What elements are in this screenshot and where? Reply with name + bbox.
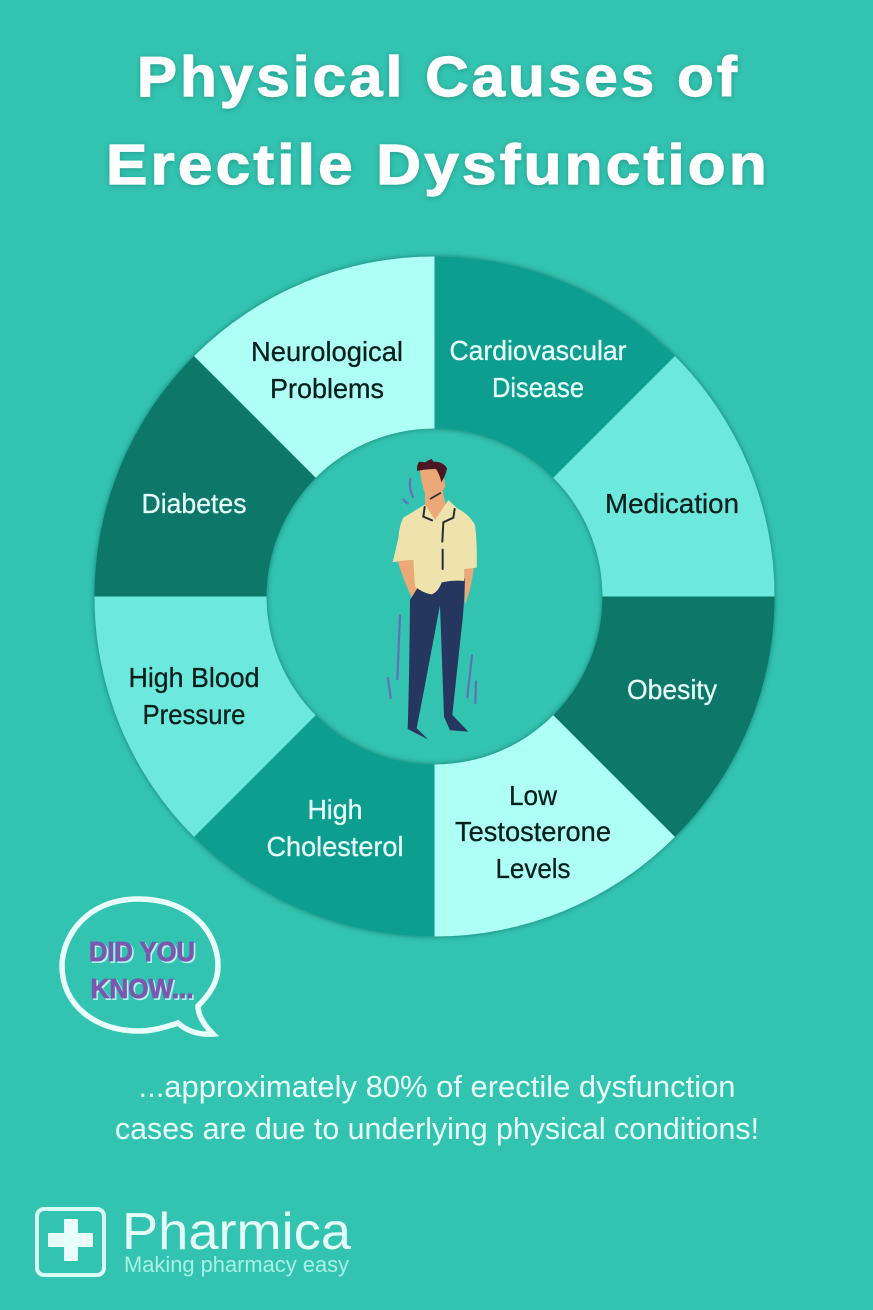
- segment: Low Testosterone Levels: [434, 715, 675, 936]
- segment: High Cholesterol: [194, 715, 434, 936]
- label: Low Testosterone Levels: Low: [509, 780, 558, 811]
- hair: [417, 459, 447, 482]
- label: High Cholesterol: Cholesterol: [266, 831, 404, 862]
- statistic text: [115, 1069, 759, 1146]
- icon: plus box: [37, 1209, 104, 1275]
- segment: Cardiovascular Disease: [434, 256, 675, 478]
- statistic text: cases are due to underlying physical conditions!: [115, 1111, 759, 1146]
- label: Cardiovascular Disease: Cardiovascular: [450, 335, 626, 366]
- label: High Blood Pressure: Pressure: [142, 699, 246, 730]
- segment labels: [128, 335, 739, 884]
- trousers: [408, 578, 468, 740]
- segment: Medication: [553, 356, 774, 596]
- segment: Obesity: [553, 596, 774, 837]
- label: Obesity: Obesity: [627, 674, 717, 705]
- label: High Cholesterol: [266, 794, 404, 862]
- brand name: Pharmica: [122, 1203, 351, 1261]
- arms: [397, 558, 420, 598]
- title: Erectile Dysfunction: [106, 133, 770, 197]
- label: Cardiovascular Disease: Disease: [492, 372, 584, 403]
- label: Diabetes: Diabetes: [142, 488, 246, 519]
- did you know text: KNOW...: [90, 973, 194, 1004]
- logo: Pharmica: [37, 1203, 351, 1277]
- did you know text: KNOW...: [92, 974, 195, 1006]
- tagline: Making pharmacy easy: [124, 1252, 349, 1277]
- shirt seams: [423, 507, 455, 569]
- statistic text: ...approximately 80% of erectile dysfunction: [138, 1069, 736, 1104]
- donut chart: physical causes: [94, 256, 774, 936]
- label: Neurological Problems: [251, 336, 403, 404]
- stress lines: [388, 479, 476, 703]
- label: Low Testosterone Levels: Levels: [496, 853, 570, 884]
- segment: Neurological Problems: [194, 256, 434, 478]
- face: [420, 468, 445, 499]
- label: High Blood Pressure: [128, 662, 260, 730]
- speech bubble: [62, 899, 218, 1034]
- title: [106, 45, 770, 197]
- label: Neurological Problems: Problems: [270, 373, 384, 404]
- did you know text: [89, 936, 196, 1006]
- title: Physical Causes of: [137, 45, 740, 109]
- segment: High Blood Pressure: [94, 596, 316, 837]
- label: High Blood Pressure: High Blood: [128, 662, 260, 693]
- did you know text: DID YOU: [90, 938, 196, 968]
- shirt: [393, 500, 477, 594]
- label: Low Testosterone Levels: [455, 780, 611, 884]
- segment: Diabetes: [94, 356, 316, 596]
- did you know text: DID YOU: [89, 936, 195, 967]
- callout: did you know: [62, 899, 218, 1034]
- neck: [425, 485, 446, 520]
- label: High Cholesterol: High: [308, 794, 362, 825]
- label: Neurological Problems: Neurological: [251, 336, 403, 367]
- label: Low Testosterone Levels: Testosterone: [455, 816, 611, 847]
- label: Cardiovascular Disease: [450, 335, 626, 403]
- label: Medication: Medication: [605, 488, 739, 519]
- icon: stressed man: [388, 459, 477, 740]
